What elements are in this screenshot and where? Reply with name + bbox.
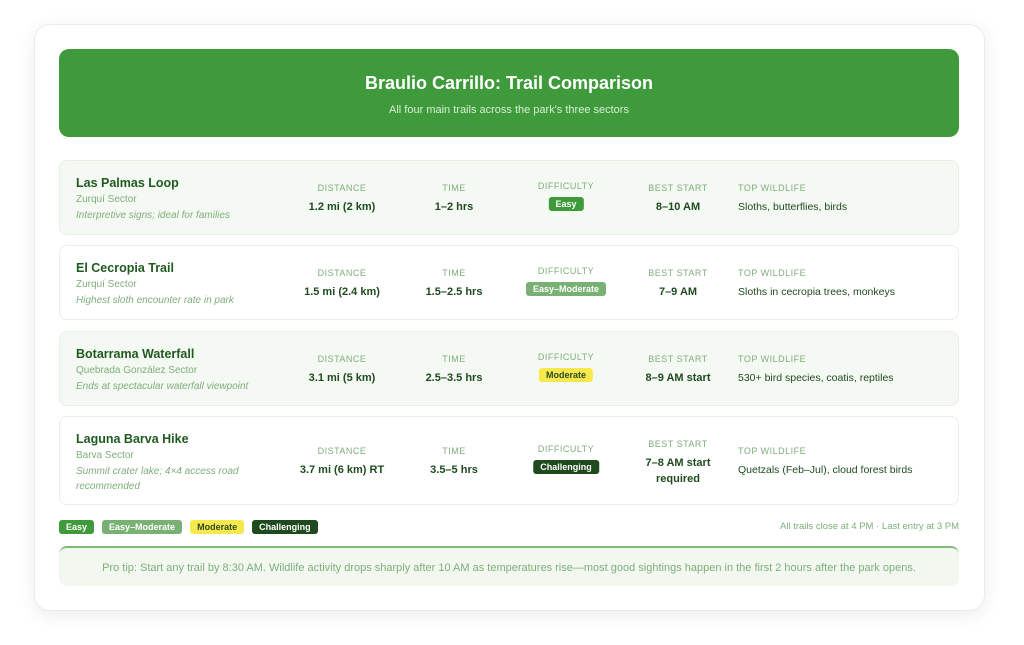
- row: El Cecropia: Easy–Moderate: [533, 284, 599, 294]
- row: Laguna Barva: required: [656, 473, 700, 485]
- row: Laguna Barva: Barva Sector: [76, 450, 134, 461]
- row: Las Palmas: Zurquí Sector: [76, 194, 137, 205]
- row: El Cecropia: 1.5 mi (2.4 km): [304, 286, 380, 298]
- row: Laguna Barva: [59, 416, 959, 505]
- header: [59, 49, 959, 137]
- row: Laguna Barva: 7–8 AM start: [645, 457, 711, 469]
- legend: Moderate: [197, 522, 237, 532]
- row: El Cecropia: BEST START: [648, 268, 708, 278]
- row: El Cecropia: DIFFICULTY: [538, 266, 594, 276]
- row: El Cecropia: TOP WILDLIFE: [738, 268, 806, 278]
- row: Las Palmas: DIFFICULTY: [538, 181, 594, 191]
- row: Las Palmas: Las Palmas Loop: [76, 176, 179, 190]
- row: Laguna Barva: BEST START: [648, 439, 708, 449]
- pro tip: [59, 546, 959, 586]
- row: Laguna Barva: Challenging: [540, 462, 592, 472]
- row: Laguna Barva: DISTANCE: [318, 446, 366, 456]
- row: Botarrama: DIFFICULTY: [538, 352, 594, 362]
- legend: Challenging: [259, 522, 311, 532]
- row: Laguna Barva: 3.5–5 hrs: [430, 464, 478, 476]
- row: Laguna Barva: Quetzals (Feb–Jul), cloud forest birds: [738, 464, 912, 476]
- row: Botarrama: DISTANCE: [318, 354, 366, 364]
- row: El Cecropia: 7–9 AM: [659, 286, 697, 298]
- pro tip: Pro tip: Start any trail by 8:30 AM. Wildlife activity drops sharply after 10 AM as temperatures rise—most good sightings happen in the first 2 hours after the park opens.: [102, 562, 916, 574]
- row: Las Palmas: Interpretive signs; ideal for families: [76, 210, 230, 221]
- row: El Cecropia: Sloths in cecropia trees, monkeys: [738, 286, 895, 298]
- row: Las Palmas: DISTANCE: [318, 183, 366, 193]
- row: Botarrama: BEST START: [648, 354, 708, 364]
- row: Las Palmas: 8–10 AM: [656, 201, 700, 213]
- row: El Cecropia: Zurquí Sector: [76, 279, 137, 290]
- row: El Cecropia: El Cecropia Trail: [76, 261, 174, 275]
- row: Botarrama: TOP WILDLIFE: [738, 354, 806, 364]
- row: Laguna Barva: 3.7 mi (6 km) RT: [300, 464, 384, 476]
- header: Braulio Carrillo: Trail Comparison: [365, 73, 653, 93]
- row: Las Palmas: BEST START: [648, 183, 708, 193]
- legend: [59, 520, 318, 534]
- row: Botarrama: 2.5–3.5 hrs: [426, 372, 482, 384]
- row: Las Palmas: 1.2 mi (2 km): [309, 201, 375, 213]
- row: El Cecropia: Highest sloth encounter rate in park: [76, 295, 234, 306]
- row: El Cecropia: 1.5–2.5 hrs: [426, 286, 482, 298]
- row: El Cecropia: TIME: [442, 268, 466, 278]
- row: Botarrama: 3.1 mi (5 km): [309, 372, 375, 384]
- row: Botarrama: Quebrada González Sector: [76, 365, 197, 376]
- row: Las Palmas: Sloths, butterflies, birds: [738, 201, 847, 213]
- header: All four main trails across the park's three sectors: [389, 104, 629, 116]
- row: Laguna Barva: DIFFICULTY: [538, 444, 594, 454]
- row: Laguna Barva: TIME: [442, 446, 466, 456]
- row: Botarrama: 8–9 AM start: [645, 372, 711, 384]
- row: El Cecropia: DISTANCE: [318, 268, 366, 278]
- row: Las Palmas: 1–2 hrs: [435, 201, 473, 213]
- row: Laguna Barva: Summit crater lake; 4×4 access road recommended: [76, 466, 239, 492]
- row: Botarrama: [59, 331, 959, 406]
- row: Botarrama: TIME: [442, 354, 466, 364]
- row: Botarrama: Botarrama Waterfall: [76, 347, 194, 361]
- row: Las Palmas: TIME: [442, 183, 466, 193]
- row: Laguna Barva: Laguna Barva Hike: [76, 432, 189, 446]
- row: Las Palmas: Easy: [555, 199, 577, 209]
- closing note: All trails close at 4 PM · Last entry at 3 PM: [780, 521, 959, 532]
- legend: Easy: [66, 522, 87, 532]
- row: Las Palmas: [59, 160, 959, 235]
- row: Botarrama: Moderate: [546, 370, 586, 380]
- row: Las Palmas: TOP WILDLIFE: [738, 183, 806, 193]
- legend: Easy–Moderate: [109, 522, 175, 532]
- row: El Cecropia: [59, 245, 959, 320]
- row: Botarrama: Ends at spectacular waterfall viewpoint: [76, 381, 248, 392]
- row: Botarrama: 530+ bird species, coatis, reptiles: [738, 372, 894, 384]
- row: Laguna Barva: TOP WILDLIFE: [738, 446, 806, 456]
